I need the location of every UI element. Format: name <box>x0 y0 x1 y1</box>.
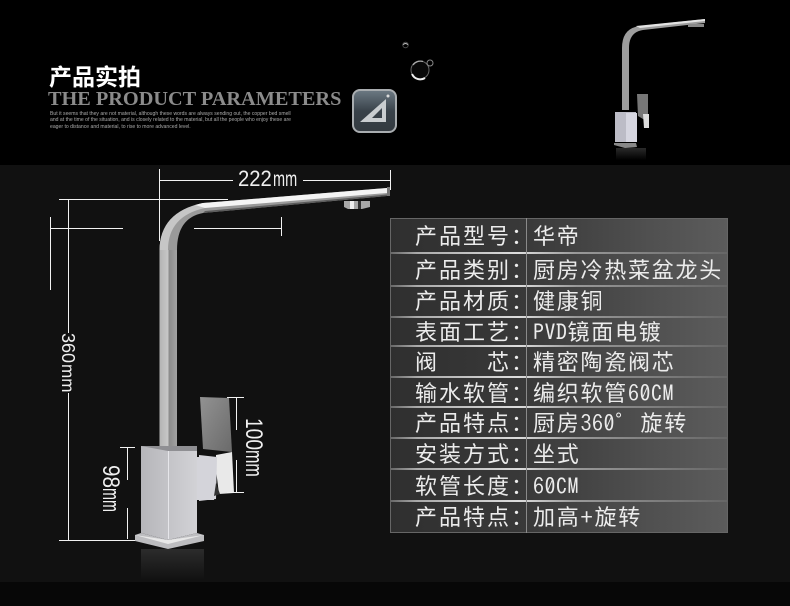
row: feature <box>415 406 688 438</box>
footer band <box>0 582 790 606</box>
dimension: 100mm: mm <box>240 450 266 477</box>
row: category: 厨房冷热菜盆龙头 <box>533 253 723 285</box>
row: model: 产品型号： <box>415 219 535 251</box>
subtitle: THE PRODUCT PARAMETERS <box>48 88 341 110</box>
dimension: 360mm <box>50 199 282 540</box>
header band <box>0 0 790 165</box>
dimension: 100mm: 100 <box>240 418 268 450</box>
row: category: 产品类别： <box>415 253 535 285</box>
intro text: But it seems that they are not material, although these words are always sending out, the copper bed smell <box>50 111 291 117</box>
row: material: 产品材质： <box>415 284 535 316</box>
intro text: eager to distance and material, to rise to more advanced level. <box>50 124 191 130</box>
spout tip <box>387 187 390 196</box>
row: model: 华帝 <box>533 219 581 251</box>
dimension: 100mm <box>227 397 268 493</box>
row: hose length: 软管长度： <box>415 469 535 501</box>
dimension: 98mm <box>97 447 135 539</box>
handle paddle <box>200 397 232 452</box>
row: installation: 坐式 <box>533 437 581 469</box>
small faucet photo <box>614 19 705 158</box>
row: feature: 厨房360°旋转 <box>533 406 688 438</box>
dimension: 222mm <box>159 167 390 241</box>
reflection <box>141 549 204 580</box>
intro text: and at the time of the situation, and is closely related to the material, but all the people who enjoy these are <box>50 117 291 123</box>
row: installation: 安装方式： <box>415 437 535 469</box>
base body <box>141 446 197 540</box>
row: hose: 编织软管60CM <box>533 376 674 408</box>
spout arm <box>160 188 387 250</box>
base foot <box>135 533 204 549</box>
row: finish: 表面工艺： <box>415 315 535 347</box>
row: feature 2: 加高+旋转 <box>533 500 642 532</box>
dimension: 98mm: mm <box>97 488 124 512</box>
row: hose length: 60CM <box>533 475 579 497</box>
panel: specification table <box>390 218 728 533</box>
row: category <box>415 253 723 285</box>
row: feature 2 <box>415 500 642 532</box>
row: feature: 产品特点： <box>415 406 535 438</box>
row: finish <box>415 315 663 347</box>
icon: set square badge <box>352 89 397 133</box>
row: valve core <box>415 345 676 377</box>
intro text <box>50 111 291 130</box>
title: 产品实拍 <box>49 58 141 92</box>
dimension: 222mm: mm <box>273 167 297 191</box>
row: material <box>415 284 604 316</box>
handle lever <box>216 452 234 494</box>
row: feature 2: 产品特点： <box>415 500 535 532</box>
dimension: 98mm: 98 <box>98 465 124 488</box>
row: hose: 输水软管： <box>415 376 535 408</box>
aerator <box>344 201 370 209</box>
dimension: 360mm: 360 <box>58 333 78 363</box>
dimension: 222mm: 222 <box>238 167 272 191</box>
vertical pipe <box>160 250 177 447</box>
handle stem <box>199 455 217 501</box>
row: valve core: 阀 芯： <box>415 345 535 377</box>
row: finish: PVD镜面电镀 <box>533 315 663 347</box>
dimension: 360mm: mm <box>58 364 78 392</box>
row: material: 健康铜 <box>533 284 604 316</box>
row: hose <box>415 376 674 408</box>
row: valve core: 精密陶瓷阀芯 <box>533 345 676 377</box>
icon: water bubbles <box>402 42 434 80</box>
